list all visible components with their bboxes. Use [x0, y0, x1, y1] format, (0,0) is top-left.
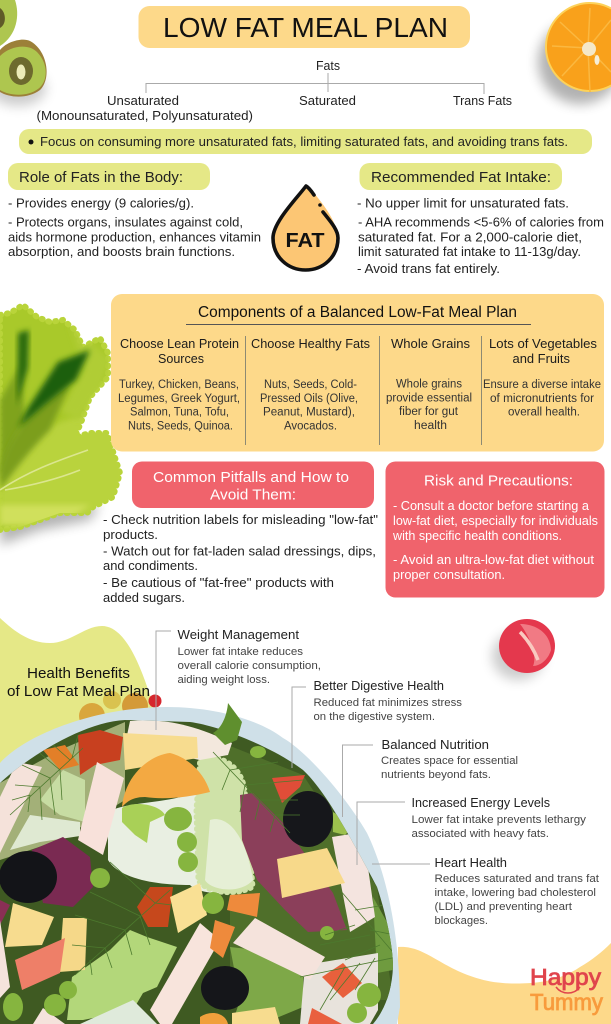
panel: recommended intake: - AHA recommends <5-6% of calories from: [358, 216, 604, 230]
crumb topping: [122, 753, 210, 807]
radicchio: [240, 793, 347, 932]
callout: balanced nutrition: Creates space for essential: [381, 755, 518, 767]
leaf over rim: [213, 703, 242, 745]
panel: risks: - Consult a doctor before starting a: [393, 499, 589, 513]
column: vegetables and fruits: of micronutrients for: [490, 393, 594, 405]
column: lean protein: Turkey, Chicken, Beans,: [119, 379, 239, 391]
logo: happy tummy: [530, 964, 603, 1015]
panel: recommended intake: saturated fat. For a 2,000-calorie diet,: [358, 230, 582, 244]
fats tree diagram: [36, 59, 512, 123]
chicken: [125, 720, 232, 760]
panel: pitfalls: and condiments.: [103, 559, 198, 573]
column: whole grains: [386, 336, 472, 432]
panel: recommended intake: - No upper limit for unsaturated fats.: [357, 196, 569, 210]
callout: better digestive health: Better Digestive Health: [314, 679, 444, 693]
column: lean protein: Choose Lean Protein: [120, 336, 239, 351]
heading: recommended intake: [360, 163, 562, 190]
column: vegetables and fruits: overall health.: [508, 406, 580, 418]
column: lean protein: Nuts, Seeds, Quinoa.: [128, 420, 233, 432]
column: lean protein: Sources: [158, 351, 204, 366]
panel: pitfalls: [103, 462, 378, 605]
column: healthy fats: Avocados.: [284, 420, 337, 432]
olives: [283, 791, 333, 847]
column: lean protein: [118, 336, 240, 432]
callout: heart health: [372, 856, 599, 927]
callout: heart health: intake, lowering bad cholesterol: [434, 887, 596, 899]
heading: role of fats: Role of Fats in the Body:: [19, 170, 183, 186]
panel: risks: proper consultation.: [393, 568, 505, 582]
panel: pitfalls: - Watch out for fat-laden salad dressings, dips,: [103, 544, 376, 558]
tomatoes behind bowl: [79, 691, 162, 729]
fats tree diagram: (Monounsaturated, Polyunsaturated): [36, 109, 253, 123]
column: healthy fats: Nuts, Seeds, Cold-: [264, 379, 357, 391]
callout: increased energy levels: [357, 796, 587, 865]
salad bowl: [0, 703, 400, 1024]
column: healthy fats: [251, 336, 370, 432]
column: whole grains: Whole Grains: [391, 336, 471, 351]
panel: role of fats: - Protects organs, insulates against cold,: [8, 216, 243, 230]
panel: role of fats: absorption, and boosts brain functions.: [8, 245, 235, 259]
column: vegetables and fruits: and Fruits: [512, 351, 570, 366]
heading: recommended intake: Recommended Fat Intake:: [371, 170, 551, 186]
column: lean protein: Legumes, Greek Yogurt,: [118, 393, 240, 405]
heading: health benefits: Health Benefits: [27, 666, 130, 682]
callout: balanced nutrition: nutrients beyond fats.: [381, 769, 491, 781]
column: vegetables and fruits: Ensure a diverse intake: [483, 379, 601, 391]
lettuce pieces: [108, 790, 253, 893]
heading: role of fats: [8, 163, 210, 190]
column: healthy fats: Peanut, Mustard),: [263, 406, 355, 418]
callout: weight management: Lower fat intake reduces: [178, 646, 304, 658]
callout: increased energy levels: associated with heavy fats.: [412, 828, 549, 840]
column: healthy fats: Pressed Oils (Olive,: [260, 393, 358, 405]
panel: role of fats: aids hormone production, enhances vitamin: [8, 230, 261, 244]
panel: role of fats: [8, 163, 261, 259]
callout: balanced nutrition: Balanced Nutrition: [382, 738, 489, 752]
cheese: [123, 733, 198, 770]
kiwi slices: [0, 0, 47, 106]
column: vegetables and fruits: [483, 336, 601, 418]
heading: health benefits: of Low Fat Meal Plan: [7, 684, 150, 700]
icon: fat drop: [273, 186, 338, 270]
yellow background blob: [398, 943, 611, 1024]
focus banner: [19, 129, 592, 154]
callout: heart health: Reduces saturated and trans fat: [434, 873, 599, 885]
callout: increased energy levels: Increased Energy Levels: [412, 796, 550, 810]
callout: better digestive health: on the digestive system.: [314, 711, 435, 723]
panel: pitfalls: added sugars.: [103, 591, 185, 605]
green background blob: [0, 618, 160, 775]
callout: heart health: blockages.: [434, 915, 488, 927]
tomatoes: [78, 730, 123, 775]
panel: pitfalls: - Check nutrition labels for misleading "low-fat": [103, 513, 378, 527]
panel: pitfalls: - Be cautious of "fat-free" products with: [103, 576, 334, 590]
column: whole grains: fiber for gut: [399, 406, 459, 418]
panel: recommended intake: [357, 163, 604, 276]
fats tree diagram: Unsaturated: [107, 94, 179, 108]
callout: weight management: aiding weight loss.: [178, 674, 270, 686]
panel: recommended intake: - Avoid trans fat entirely.: [357, 262, 500, 276]
callout: increased energy levels: Lower fat intake prevents lethargy: [412, 814, 587, 826]
column: whole grains: provide essential: [386, 392, 472, 404]
panel: role of fats: - Provides energy (9 calories/g).: [8, 196, 194, 210]
panel: risks: Risk and Precautions:: [424, 472, 573, 490]
panel: risks: low-fat diet, especially for individuals: [393, 514, 598, 528]
panel: risks: [386, 462, 604, 598]
column: whole grains: Whole grains: [396, 378, 462, 390]
column: whole grains: health: [414, 420, 447, 432]
dill: [10, 733, 397, 1010]
panel: risks: - Avoid an ultra-low-fat diet without: [393, 553, 595, 567]
heading: pitfalls: Avoid Them:: [210, 486, 296, 504]
orange slice: [538, 2, 611, 104]
column: lean protein: Salmon, Tuna, Tofu,: [130, 406, 229, 418]
peas: [3, 746, 381, 1023]
column: vegetables and fruits: Lots of Vegetables: [489, 336, 597, 351]
heading: pitfalls: [132, 462, 374, 508]
icon: tomato: [492, 619, 555, 680]
heading: pitfalls: Common Pitfalls and How to: [153, 469, 349, 486]
callout: better digestive health: [292, 679, 463, 768]
heading: health benefits: [7, 666, 150, 700]
title: [138, 6, 470, 48]
fats tree diagram: Fats: [316, 59, 340, 73]
callout: weight management: [156, 628, 321, 730]
title: LOW FAT MEAL PLAN: [163, 12, 448, 43]
callout: better digestive health: Reduced fat minimizes stress: [314, 697, 463, 709]
fats tree diagram: Trans Fats: [453, 94, 512, 108]
panel: risks: with specific health conditions.: [392, 529, 562, 543]
callout: heart health: Heart Health: [434, 856, 507, 870]
callout: weight management: overall calorie consumption,: [178, 660, 321, 672]
panel: recommended intake: limit saturated fat intake to 11-13g/day.: [358, 245, 581, 259]
logo: happy tummy: Tummy: [530, 989, 603, 1015]
components heading: Components of a Balanced Low-Fat Meal Plan: [198, 304, 517, 321]
carrots: [227, 893, 260, 917]
focus banner: Focus on consuming more unsaturated fats, limiting saturated fats, and avoiding trans fats.: [40, 135, 568, 149]
icon: fat drop: FAT: [286, 230, 324, 252]
column: healthy fats: Choose Healthy Fats: [251, 336, 370, 351]
callout: weight management: Weight Management: [178, 628, 300, 642]
panel: pitfalls: products.: [103, 528, 158, 542]
logo: happy tummy: Happy: [530, 964, 602, 990]
fats tree diagram: Saturated: [299, 94, 356, 108]
panel: components: [111, 294, 604, 452]
callout: balanced nutrition: [342, 738, 518, 817]
lettuce leaf: [0, 305, 125, 545]
callout: heart health: (LDL) and preventing heart: [434, 901, 572, 913]
